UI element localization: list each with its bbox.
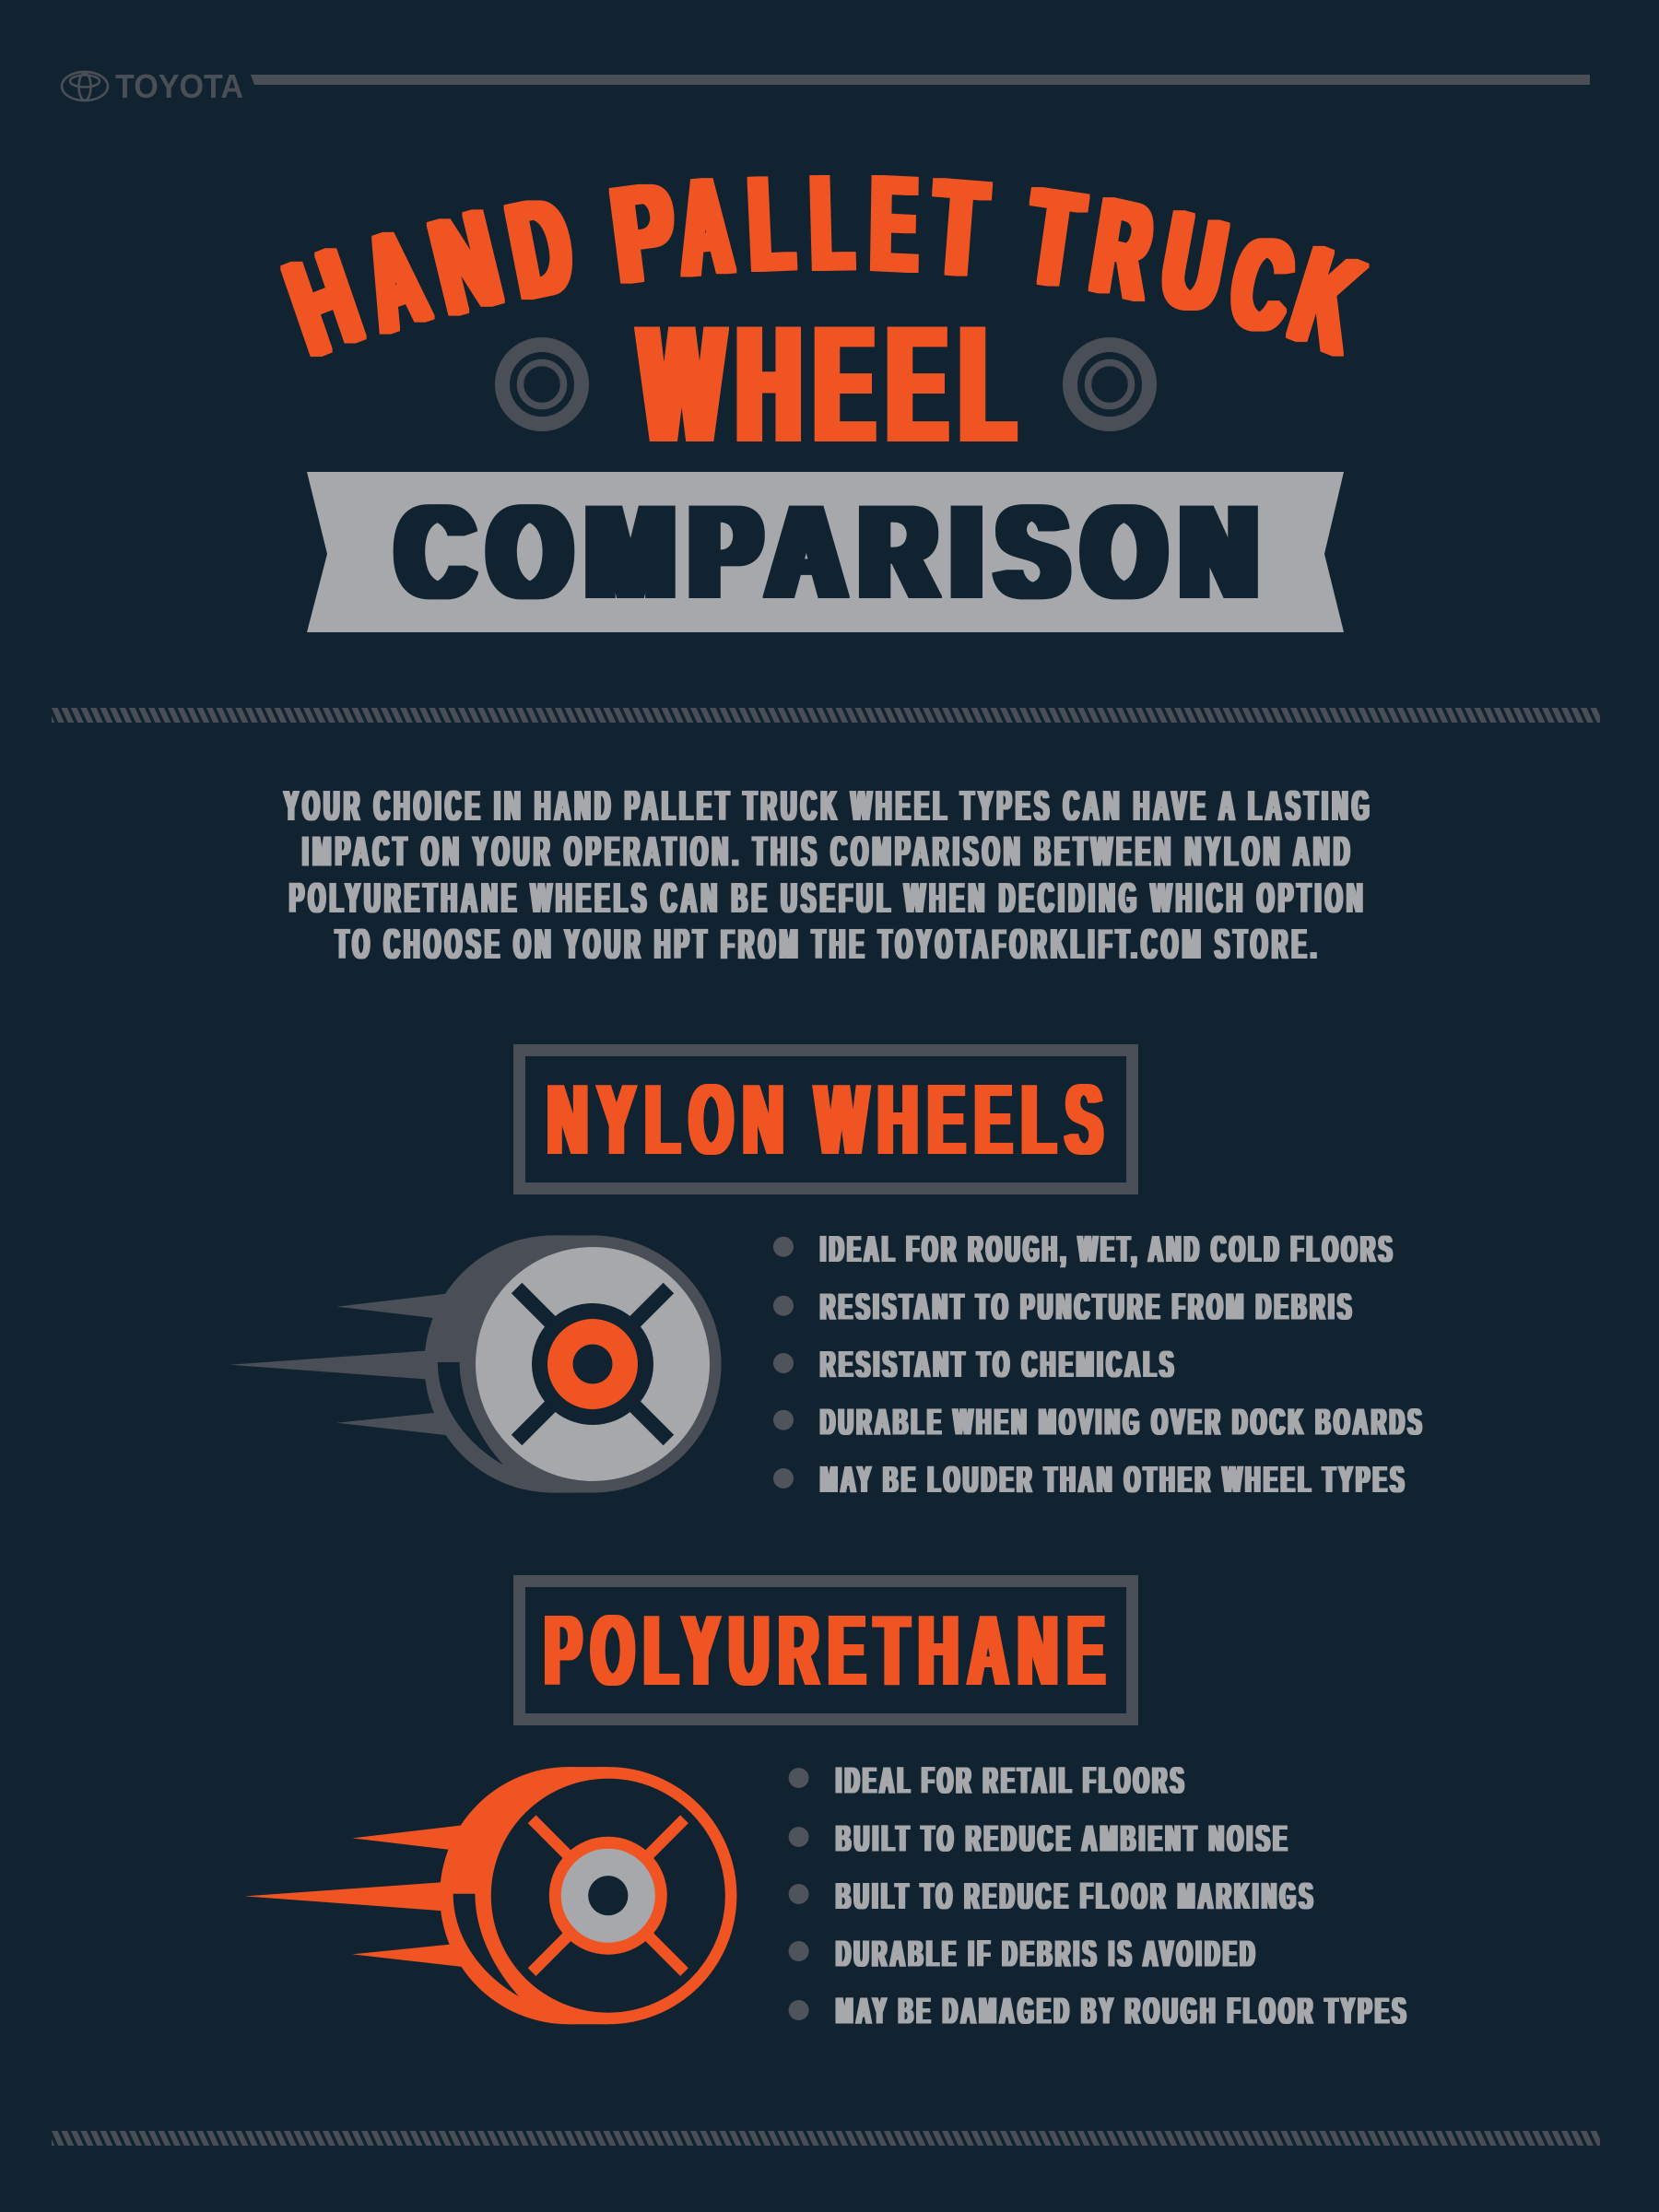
title: arched line: H [271, 220, 375, 384]
intro paragraph [284, 782, 1373, 968]
list: polyurethane bullets [789, 1768, 809, 2020]
list: nylon text [820, 1228, 1425, 1500]
title: arched line [271, 148, 1374, 384]
icon: small wheel left [502, 345, 582, 424]
divider top [52, 708, 1600, 723]
title: arched line: C [1220, 208, 1303, 362]
title: arched line: L [810, 149, 853, 299]
logo wordmark: TOYOTA [115, 67, 243, 105]
title: arched line: P [605, 155, 683, 312]
heading text: polyurethane: POLYURETHANE [545, 1594, 1114, 1707]
list: nylon bullets [773, 1237, 794, 1488]
title: arched line: R [1085, 169, 1160, 328]
title: arched line: L [747, 149, 795, 300]
banner text: COMPARISON [397, 479, 1273, 626]
list: polyurethane text: DURABLE IF DEBRIS IS AVOIDED [836, 1932, 1258, 1974]
list: polyurethane text: IDEAL FOR RETAIL FLOORS [836, 1759, 1187, 1802]
title: arched line: N [420, 182, 512, 344]
title: arched line: U [1153, 183, 1234, 342]
icon: Toyota emblem [62, 72, 108, 100]
title: arched line: D [499, 169, 582, 328]
header rule [251, 75, 1590, 85]
icon: nylon wheel [229, 1235, 722, 1493]
title: arched line: A [351, 200, 439, 361]
list: polyurethane text [836, 1759, 1409, 2032]
divider bottom [52, 2131, 1600, 2146]
title banner [307, 472, 1344, 632]
icon: small wheel right [1070, 345, 1149, 424]
Toyota logo [62, 67, 243, 105]
title: arched line: T [1019, 161, 1089, 316]
title: WHEEL: WHEEL [641, 292, 1029, 476]
panel: polyurethane heading [520, 1582, 1132, 1720]
title: arched line: E [871, 148, 918, 300]
title: arched line: K [1277, 219, 1374, 382]
list: polyurethane text: BUILT TO REDUCE AMBIENT NOISE [836, 1817, 1290, 1859]
title: arched line: T [928, 150, 991, 304]
list: nylon text: RESISTANT TO CHEMICALS [820, 1343, 1177, 1385]
panel: nylon heading [520, 1051, 1132, 1189]
title: arched line: A [675, 149, 735, 304]
icon: polyurethane wheel [245, 1767, 736, 2024]
heading text: nylon wheels: NYLON [547, 1064, 794, 1176]
heading text: nylon wheels: WHEELS [816, 1064, 1112, 1176]
